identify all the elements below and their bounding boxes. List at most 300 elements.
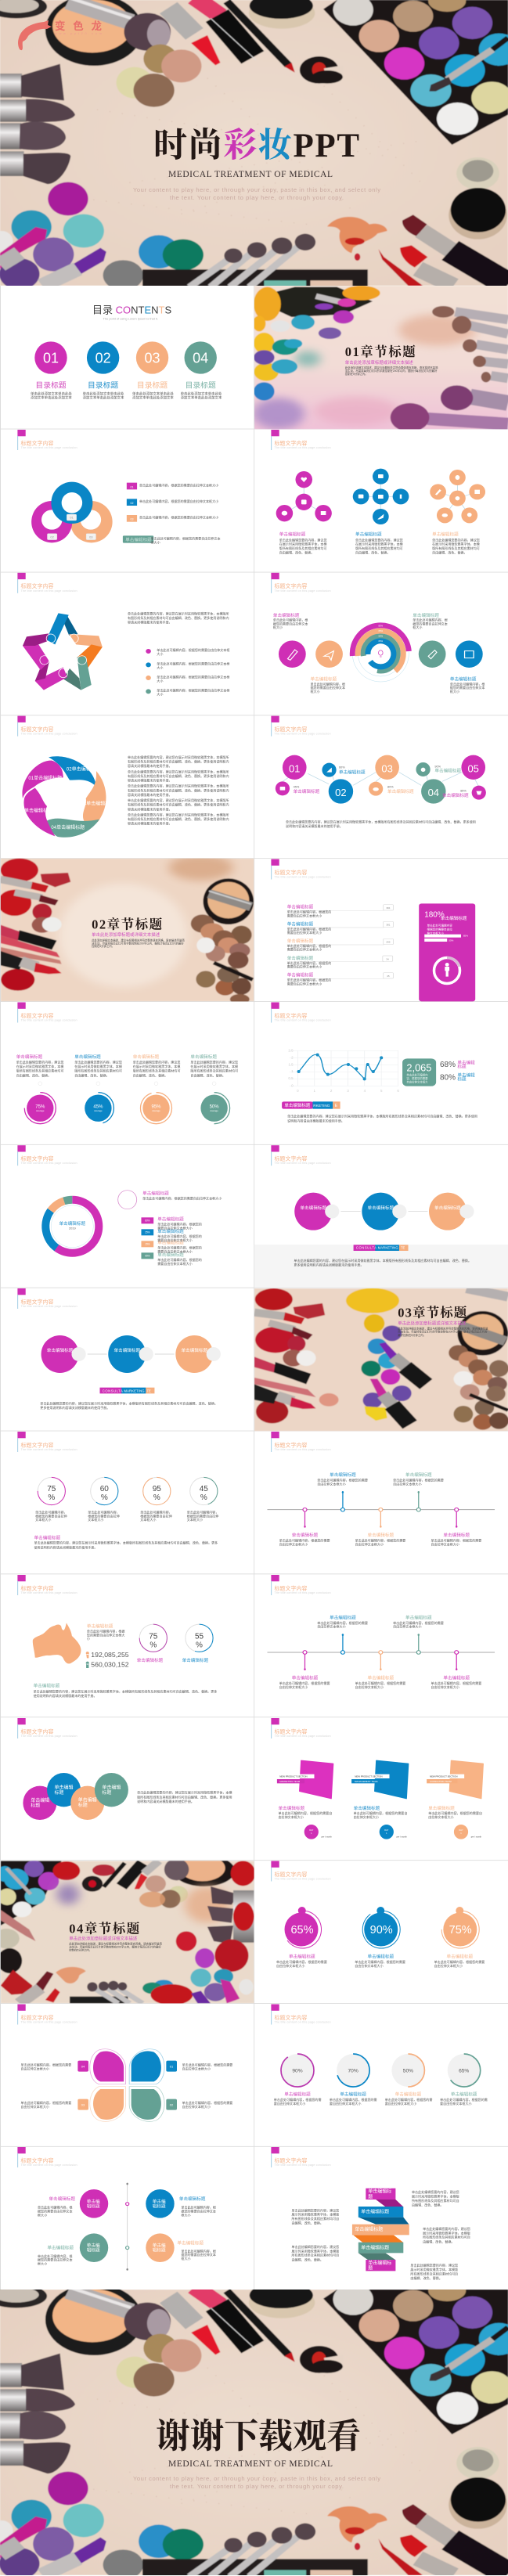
droplet text: 单击编辑标题 — [289, 1954, 315, 1960]
column text: Average — [94, 1109, 103, 1112]
spine text: 单击编辑标题 — [49, 2196, 75, 2202]
droplet text: 单击此处可编辑内容，根据您的需要 — [355, 1959, 405, 1964]
cluster captions: 在展示时采用微软雅黑字体，本模 — [355, 542, 403, 546]
chapter description — [345, 366, 438, 376]
panel: three step process on grey band — [254, 1145, 508, 1287]
ribbon text — [291, 2189, 470, 2280]
timeline captions: 自由拉伸文本框大小 — [279, 1684, 308, 1689]
spine text: 框大小 — [181, 2256, 191, 2261]
ribbon text: 展示时采用微软雅黑字体，本模版 — [410, 2267, 458, 2272]
arc labels and captions — [273, 612, 485, 694]
slide header: The title content on this page conclusion — [274, 1735, 330, 1738]
slide header: 标题文字内容 — [274, 1728, 307, 1735]
arc labels and captions: 单击此处可编辑内容，根 — [273, 618, 308, 622]
chapter description: 最好控制在5分钟之内。 — [398, 1333, 426, 1337]
spine text: 据您的需要自由拉伸文本 — [181, 2208, 216, 2213]
panel: chapter 03 cover — [254, 1288, 508, 1431]
slide header: 标题文字内容 — [20, 726, 53, 733]
panel: mirrored circles on spine — [17, 2147, 216, 2271]
logo: 变色龙 — [55, 20, 102, 32]
map statistics text: 单击此处编辑您要的内容，建议您在展示时采用微软雅黑字体，本模版所有图形线条及其相应素材均可自由编辑、改色、替换。更多 — [34, 1688, 217, 1693]
petal text: 自由拉伸文本框大小 — [182, 2104, 211, 2109]
ring labels: 单击此处可编辑内容，根据您的需 — [330, 2097, 377, 2102]
chart labels and stat text: 6 — [397, 1089, 399, 1093]
chart labels and stat text: 说明和内容请关闭模版最末的使用手册。 — [287, 1118, 344, 1122]
bubble text: 单击编辑 — [55, 1785, 74, 1791]
spine text: 单击此处可编辑内容，根 — [38, 2205, 73, 2210]
map statistics text: 192,085,255 — [91, 1651, 129, 1659]
donut labels: 需要自由拉伸文本框大小 — [157, 1261, 193, 1266]
contents entries: 单击此处添加文本单击此处 — [132, 391, 174, 397]
timeline captions: 单击此处可编辑内容，根据您的需要 — [317, 1620, 368, 1625]
chapter description: 控制在5分钟之内。 — [69, 1948, 92, 1952]
bubble text — [31, 1785, 232, 1808]
slide header: The title content on this page conclusion — [274, 1019, 330, 1022]
contents entries: 目录标题 — [186, 381, 216, 391]
ring labels: 单击编辑标题 — [340, 2091, 366, 2098]
donut labels: 单击此处可编辑内容，根据您的 — [157, 1245, 202, 1250]
petal text: 自由拉伸文本框大小 — [182, 2066, 211, 2070]
percentage discs — [24, 1082, 230, 1124]
ring labels: 单击编辑标题 — [395, 2091, 422, 2098]
timeline captions: 自由拉伸文本框大小 — [431, 1684, 459, 1689]
node labels: 85% — [460, 790, 467, 793]
chart labels and stat text: 单击此处编辑您要的内容，建议您在展示时采用微软雅黑字体，本模版所有图形线条及其相应素材均可自由编辑、改色、替换。更多使用 — [287, 1114, 477, 1119]
ring legend text: 01 — [130, 485, 133, 488]
swirl paragraphs: 容请关闭模版最末的使用手册。 — [128, 792, 172, 797]
card text — [279, 1774, 482, 1838]
spine text: 单击此处可编辑内容，根 — [38, 2254, 73, 2258]
panel: ranked list with statistic card — [271, 859, 475, 1001]
ring values and captions: 文本框大小 — [187, 1517, 203, 1522]
ring legend text: 单击此处可编辑内容，根据您的需要自由拉伸文本框大小 — [139, 515, 218, 520]
node labels: 02 — [335, 787, 347, 798]
contents entries: 单击此处添加文本单击此处 — [83, 391, 124, 397]
list text and card text: 180% — [424, 911, 445, 920]
closing description: the text. Your content to play here, or through your copy. — [170, 2483, 344, 2490]
timeline captions: 单击此处可编辑内容，根据您的需要 — [355, 1681, 405, 1685]
icon circles — [279, 640, 483, 668]
list text and card text: 根据您的需要自由拉 — [427, 927, 452, 931]
chart labels and stat text: 单击此处可编辑内 — [406, 1073, 428, 1077]
slide header — [17, 430, 77, 450]
chart labels and stat text: 0.5 — [288, 1076, 294, 1080]
swirl paragraphs: 单击此处编辑您要的内容，建议您在展示时采用微软雅黑字体，本模版所 — [128, 798, 229, 802]
ribbon text: 展示时采用微软雅黑字体，本模版 — [423, 2230, 470, 2235]
chapter description: 洁生动。尽量将每页幻灯片的字数控制在200字以内，据统计每页幻灯片的最好 — [69, 1945, 161, 1949]
panel: concentric arcs — [271, 573, 485, 694]
card text: per / month — [397, 1835, 407, 1838]
node labels: 90% — [434, 765, 441, 768]
slide header — [271, 1432, 330, 1452]
donut labels — [59, 1191, 222, 1266]
chapter description — [69, 1942, 162, 1952]
donut labels: 05% — [145, 1254, 150, 1257]
slide header: 标题文字内容 — [274, 582, 307, 589]
contents subtitle: The point of using Lorem Ipsum is that it. — [103, 317, 158, 321]
bubble text: 标题 — [31, 1802, 40, 1808]
list text and card text: 384 — [386, 906, 391, 910]
slide header — [271, 859, 330, 880]
slide header — [17, 716, 77, 737]
timeline captions: 自由拉伸文本框大小 — [393, 1624, 422, 1629]
panel: linked nodes — [271, 716, 486, 828]
process text: 更多使用说明和内容请关闭模版最末的使用手册。 — [40, 1405, 110, 1410]
map statistics text: 使用说明和内容请关闭模版最末的使用手册。 — [34, 1693, 97, 1698]
droplet gauges — [283, 1907, 479, 1948]
bubble text: 标题 — [55, 1789, 64, 1796]
card text: DAY — [384, 1828, 389, 1832]
slide header: 标题文字内容 — [20, 1728, 53, 1735]
chart labels and stat text: 标题 — [457, 1076, 467, 1083]
slide header — [17, 1145, 77, 1166]
swirl labels — [24, 766, 114, 830]
ring values and captions: 根据您的需要自由拉伸 — [88, 1513, 120, 1518]
arc labels and captions: 据您的需要自由拉伸文本 — [413, 621, 448, 625]
swirl paragraphs: 单击此处编辑您要的内容，建议您在展示时采用微软雅黑字体，本模版所 — [128, 755, 229, 759]
panel: interlocking rings — [17, 430, 221, 545]
ring values and captions: 单击此处可编辑内容， — [187, 1509, 218, 1514]
slide header: The title content on this page conclusion — [20, 1448, 77, 1451]
slide header: 标题文字内容 — [274, 1155, 307, 1162]
spine text: 单击编辑标题 — [177, 2239, 204, 2246]
list text and card text: 单击此处可编辑内容，根据您的 — [287, 960, 331, 965]
ribbon text: 单击此处编辑您要的内容，建议您 — [412, 2189, 459, 2194]
arc labels and captions: 65% — [378, 629, 384, 632]
process text — [294, 1205, 471, 1267]
process circles and tabs — [41, 1335, 221, 1393]
logo: www.ppt20.com — [55, 31, 103, 35]
logo — [18, 20, 103, 50]
ribbon text: 单击此处编辑您要的内容，建议您 — [291, 2207, 339, 2212]
list text and card text: 需要自由拉伸文本框大小 — [287, 913, 322, 917]
petal text: 单击此处可编辑内容，根据您的需要 — [20, 2100, 71, 2105]
swirl paragraphs: 容请关闭模版最末的使用手册。 — [128, 763, 172, 768]
card text: MANAGEMENT TEAM — [355, 1780, 378, 1783]
chapter photo — [0, 855, 254, 1004]
chapter photo — [254, 1288, 508, 1431]
star description and bullet list: 有图形线条及其相应素材均可自由编辑、改色、替换。更多使用说明和内 — [128, 615, 229, 620]
chart labels and stat text: 1.5 — [288, 1062, 294, 1066]
ring labels: 要自由拉伸文本框大小 — [385, 2101, 416, 2106]
slide header: The title content on this page conclusion — [274, 1162, 330, 1165]
gauge ring — [434, 957, 460, 983]
chart labels and stat text: 1 — [291, 1069, 294, 1073]
column text: 单击编辑标题 — [133, 1054, 160, 1060]
chapter description: 控制在5分钟之内。 — [345, 372, 368, 376]
contents title: 目录 CONTENTS — [92, 304, 171, 316]
donut labels: 25% — [145, 1230, 150, 1234]
process text: CONSULTA — [103, 1389, 123, 1392]
ribbon text: 单击此处编辑您要的内容，建议您 — [423, 2226, 470, 2231]
slide header — [17, 2147, 77, 2167]
droplet text: 90% — [370, 1924, 393, 1937]
arc labels and captions: 框大小 — [413, 625, 422, 629]
bubble text: 单击编辑 — [102, 1785, 121, 1791]
map statistics text: 单击编辑标题 — [34, 1683, 60, 1689]
ribbon star diagram — [23, 613, 151, 694]
card text: DAY — [459, 1828, 463, 1832]
ring legend text: 02 — [50, 535, 55, 539]
cluster captions: 单击此处编辑您要的内容，建议您 — [279, 537, 327, 542]
node labels: 45% — [294, 785, 300, 788]
timeline captions: 单击此处可编辑内容，根据您的需要 — [393, 1478, 444, 1483]
slide header: The title content on this page conclusion — [20, 1591, 77, 1594]
petal text: 单击此处可编辑内容，根据您的需要 — [20, 2062, 71, 2066]
list text and card text: 单击此处可编辑内容，根据您的 — [287, 910, 331, 914]
panel: chapter 01 cover — [253, 286, 508, 432]
node labels — [286, 762, 479, 828]
slide header: 标题文字内容 — [20, 1584, 53, 1591]
ring values and captions: 95 — [153, 1485, 161, 1493]
spine text: 单击编辑标题 — [179, 2196, 206, 2202]
ring legend text: 单击此处可编辑内容，根据您的需要自由拉伸文本 — [150, 536, 221, 541]
swirl paragraphs: 有图形线条及其相应素材均可自由编辑、改色、替换。更多使用说明和内 — [128, 773, 229, 778]
contents entries: 01 — [43, 351, 59, 366]
process text: 单击此处编辑您要的内容，建议您在展示时采用微软雅黑字体，本模版所有图形线条及其相应素材均可自由编辑、改色、替换。 — [294, 1258, 471, 1263]
arc labels and captions: 单击编辑标题 — [273, 612, 300, 618]
card text: 由拉伸文本框大小 — [428, 1814, 454, 1819]
ribbon text: 单击此处编辑您要的内容，建议您 — [410, 2263, 458, 2268]
star description and bullet list: 大小 — [157, 692, 163, 697]
card text: MARKETING TEAM — [279, 1780, 301, 1783]
bubble text: 标题 — [78, 1802, 88, 1808]
ribbon text: 所有图形线条及其相应素材均可自 — [291, 2253, 339, 2257]
contents entries: 单击此处添加文本单击此处 — [31, 391, 72, 397]
droplet text: 单击编辑标题 — [368, 1954, 394, 1960]
cluster captions: 版所有图形线条及其相应素材均可 — [279, 546, 327, 550]
closing subtitle: MEDICAL TREATMENT OF MEDICAL — [168, 2459, 333, 2469]
slide header — [17, 1288, 77, 1309]
slide header: The title content on this page conclusion — [274, 1877, 330, 1880]
chart labels and stat text: 容，根据您的需要 — [406, 1076, 428, 1080]
arc labels and captions: 85% — [378, 625, 384, 628]
slide header — [271, 1145, 330, 1166]
column text: 在展示时采用微软雅黑字体，本模 — [190, 1064, 238, 1068]
slide header: The title content on this page conclusion — [274, 1448, 330, 1451]
panel: timeline two — [267, 1575, 495, 1689]
ribbon text: 由编辑、改色、替换。 — [410, 2275, 442, 2280]
droplet text: 自由拉伸文本框大小 — [276, 1963, 304, 1968]
timeline captions: 单击此处可编辑内容，根据您的需要 — [355, 1538, 405, 1543]
swirl diagram — [23, 756, 106, 838]
map statistics text: 单击编辑标题 — [182, 1657, 209, 1663]
chart labels and stat text: 1 — [314, 1089, 316, 1093]
cluster captions: 版所有图形线条及其相应素材均可 — [355, 546, 403, 550]
chapter title: 03章节标题 — [398, 1305, 467, 1320]
list text and card text: 299 — [386, 941, 391, 944]
slide header: The title content on this page conclusion — [274, 589, 330, 593]
donut labels: 需要自由拉伸文本框大小 — [157, 1249, 193, 1254]
panel: chapter 04 cover — [0, 1855, 255, 2005]
donut labels: 单击编辑标题 — [157, 1240, 184, 1246]
ring values and captions: % — [48, 1493, 55, 1502]
ribbon text: 由编辑、改色、替换。 — [412, 2203, 443, 2207]
chart labels and stat text: 2 — [330, 1089, 333, 1093]
timeline captions: 自由拉伸文本框大小 — [355, 1684, 384, 1689]
slide header: 标题文字内容 — [274, 869, 307, 876]
chart labels and stat text: E — [335, 1104, 338, 1108]
donut labels: 单击此处可编辑内容，根据您的 — [157, 1257, 202, 1262]
cover description: Your content to play here, or through your copy, paste in this box, and select only — [133, 186, 380, 193]
swirl paragraphs: 容请关闭模版最末的使用手册。 — [128, 821, 172, 826]
column text: 单击此处编辑您要的内容，建议您 — [74, 1059, 122, 1064]
map statistics text: 55 — [195, 1632, 204, 1641]
chart labels and stat text: 2.5 — [288, 1048, 294, 1052]
node labels: 04 — [428, 787, 439, 798]
card text: 单击此处可编辑内容，根据您的需要自 — [279, 1810, 332, 1815]
process text: 单击编辑标题 — [47, 1347, 74, 1353]
ring legend text — [50, 482, 221, 545]
process text: 单击编辑标题 — [434, 1205, 461, 1211]
spine text: 框大小 — [181, 2212, 191, 2217]
contents entries: 单击此处添加文本单击此处 — [181, 391, 222, 397]
chapter description: 此处添加详细文本描述，建议与标题相关并符合整体语言风格，语言描述尽量 — [398, 1327, 488, 1331]
timeline captions: 单击编辑标题 — [368, 1674, 394, 1681]
slide header: 标题文字内容 — [274, 1584, 307, 1591]
slide header: The title content on this page conclusion — [274, 2021, 330, 2024]
spine text: 框大小 — [38, 2212, 47, 2217]
petal text — [20, 2062, 232, 2109]
star description and bullet list: 单击此处可编辑内容，根据您的需要自由拉伸文本框 — [157, 647, 229, 652]
arc labels and captions: 单击编辑标题 — [310, 676, 337, 682]
swirl paragraphs: 容请关闭模版最末的使用手册。 — [128, 806, 172, 811]
list text and card text: 需要自由拉伸文本框大小 — [287, 981, 322, 985]
list text and card text: 381 — [386, 924, 391, 927]
folded ribbon graphic — [352, 2189, 409, 2271]
map statistics text: 单击编辑标题 — [87, 1623, 113, 1630]
ribbon text: 单击编辑标题 — [361, 2209, 389, 2215]
star description and bullet list — [128, 611, 229, 697]
donut labels: 单击此处可编辑内容，根据您的需要自由拉伸文本框大小 — [142, 1196, 222, 1201]
slide header: 标题文字内容 — [274, 2014, 307, 2021]
slide header: 标题文字内容 — [274, 726, 307, 733]
ribbon text: 单击编辑标 — [368, 2189, 391, 2195]
chart labels and stat text: RKETING — [313, 1104, 330, 1108]
closing photo: makeup flat lay — [0, 2280, 508, 2576]
swirl paragraphs: 单击此处编辑您要的内容，建议您在展示时采用微软雅黑字体，本模版所 — [128, 812, 229, 816]
star description and bullet list: 大小 — [157, 679, 163, 683]
timeline graphic — [267, 1634, 495, 1670]
ring legend text: 03 — [130, 518, 133, 521]
ring values and captions: 单击此处可编辑内容， — [35, 1509, 67, 1514]
chapter subtitle: 单击此处添加章标题或详细文本描述 — [92, 931, 160, 938]
chapter description: 此处添加详细文本描述，建议与标题相关并符合整体语言风格，语言描述尽量简 — [345, 366, 438, 369]
node labels: 03 — [381, 762, 393, 774]
donut labels: 单击编辑标题 — [59, 1220, 85, 1227]
slide header — [271, 430, 330, 450]
slide header — [17, 2004, 77, 2024]
column text: Average — [210, 1109, 218, 1112]
list text and card text: 单击此处可编辑内容 — [427, 923, 452, 927]
ring labels: 单击编辑标题 — [284, 2091, 311, 2098]
donut labels: 单击编辑标题 — [157, 1216, 184, 1223]
column text: 单击此处编辑您要的内容，建议您 — [190, 1059, 238, 1064]
slide header: 标题文字内容 — [20, 1298, 53, 1305]
outline circle and legend swatches — [118, 1191, 153, 1259]
contents entries — [31, 351, 222, 401]
process circles and tabs — [254, 1193, 508, 1287]
ribbon text: 单击编辑标题 — [361, 2244, 389, 2250]
petal text: 单击此处可编辑内容，根据您的需要 — [182, 2062, 232, 2066]
timeline captions: 自由拉伸文本框大小 — [431, 1542, 459, 1547]
ring values and captions: 文本框大小 — [140, 1517, 156, 1522]
list text and card text: 单击编辑标题 — [287, 904, 314, 910]
swirl paragraphs: 容请关闭模版最末的使用手册。 — [128, 778, 172, 783]
chart labels and stat text: 单击编辑 — [457, 1072, 475, 1078]
list text and card text: 单击此处可编辑内容，根据您的 — [287, 926, 331, 931]
map statistics text: 小 — [87, 1636, 90, 1641]
timeline captions — [279, 1472, 481, 1547]
contents entries: 目录标题 — [35, 381, 67, 391]
map statistics text: 75 — [149, 1632, 158, 1641]
panel: folded ribbon — [271, 2147, 470, 2280]
timeline graphic — [267, 1491, 495, 1528]
column text: 在展示时采用微软雅黑字体，本模 — [74, 1064, 122, 1068]
ribbon text: 展示时采用微软雅黑字体，本模版 — [291, 2212, 339, 2217]
map and person icons — [33, 1623, 89, 1668]
timeline captions: 单击编辑标题 — [330, 1472, 356, 1478]
donut labels: 单击编辑标题 — [157, 1228, 184, 1234]
card text: per / month — [322, 1835, 332, 1838]
ribbon text: 由编辑、改色、替换。 — [291, 2221, 323, 2225]
spine text: 单击此处可编辑内容，根 — [181, 2248, 216, 2253]
skewed cards and tags — [277, 1760, 483, 1839]
ring values and captions: 单击此处编辑您要的内容，建议您在展示时采用微软雅黑字体，本模版所有图形线条及其相应素材均可自由编辑、改色、替换。更多 — [34, 1540, 218, 1545]
slide header: The title content on this page conclusion — [274, 875, 330, 878]
ribbon text: 展示时采用微软雅黑字体，本模版 — [412, 2194, 459, 2199]
ribbon text: 所有图形线条及其相应素材均可自 — [423, 2235, 470, 2239]
slide header: 标题文字内容 — [20, 582, 53, 589]
cluster captions: 版所有图形线条及其相应素材均可 — [432, 546, 480, 550]
timeline captions: 单击编辑标题 — [368, 1532, 394, 1538]
slide header: The title content on this page conclusion — [20, 1305, 77, 1308]
list text and card text: 单击编辑标题 — [287, 955, 314, 961]
bubble text: 版所有图形线条及其相应素材均可自由编辑、改色、替换。更多使用 — [137, 1794, 232, 1799]
contents entries: 添加文本单击此处添加文本 — [132, 395, 174, 401]
ring labels: 单击此处可编辑内容，根据您的需 — [274, 2097, 322, 2102]
ring legend text: 单击此处可编辑内容，根据您的需要自由拉伸文本框大小 — [139, 499, 218, 503]
timeline captions: 单击此处可编辑内容，根据您的需要 — [431, 1538, 481, 1543]
arc labels and captions: 据您的需要自由拉伸文本 — [273, 621, 308, 625]
cluster captions — [279, 531, 480, 554]
chapter subtitle: 单击此处添加章标题或详细文本描述 — [398, 1320, 467, 1326]
chapter description: 洁生动。尽量将每页幻灯片的字数控制在200字以内，据统计每页幻灯片的最好 — [345, 369, 438, 373]
chapter description: 控制在5分钟之内。 — [92, 944, 114, 948]
timeline captions: 单击此处可编辑内容，根据您的需要 — [317, 1478, 368, 1483]
ribbon text: 所有图形线条及其相应素材均可自 — [412, 2198, 459, 2203]
spine diagram — [80, 2183, 175, 2271]
panel: three droplet gauges — [271, 1861, 485, 1968]
column text: Average — [36, 1109, 45, 1112]
node labels: 60% — [339, 766, 345, 769]
bubble text: 单击此处编辑您要的内容，建议您在展示时采用微软雅黑字体，本模 — [137, 1790, 232, 1795]
node labels: 单击编辑标题 — [434, 768, 461, 774]
ring labels: 要自由拉伸文本框大小 — [330, 2101, 361, 2106]
slide header: 标题文字内容 — [274, 439, 307, 446]
radial arc chart — [352, 625, 409, 682]
slide header: The title content on this page conclusion — [20, 1019, 77, 1022]
chart labels and stat text: 80% — [440, 1073, 456, 1082]
panel: timeline one — [267, 1432, 495, 1547]
swirl paragraphs: 单击此处编辑您要的内容，建议您在展示时采用微软雅黑字体，本模版所 — [128, 784, 229, 788]
list text and card text: 85% — [463, 935, 468, 938]
slide header: 标题文字内容 — [274, 2156, 307, 2163]
star description and bullet list: 大小 — [157, 665, 163, 669]
timeline captions: 单击编辑标题 — [405, 1614, 432, 1620]
ring values and captions: 根据您的需要自由拉伸 — [140, 1513, 172, 1518]
ribbon text: 题 — [368, 2265, 373, 2271]
